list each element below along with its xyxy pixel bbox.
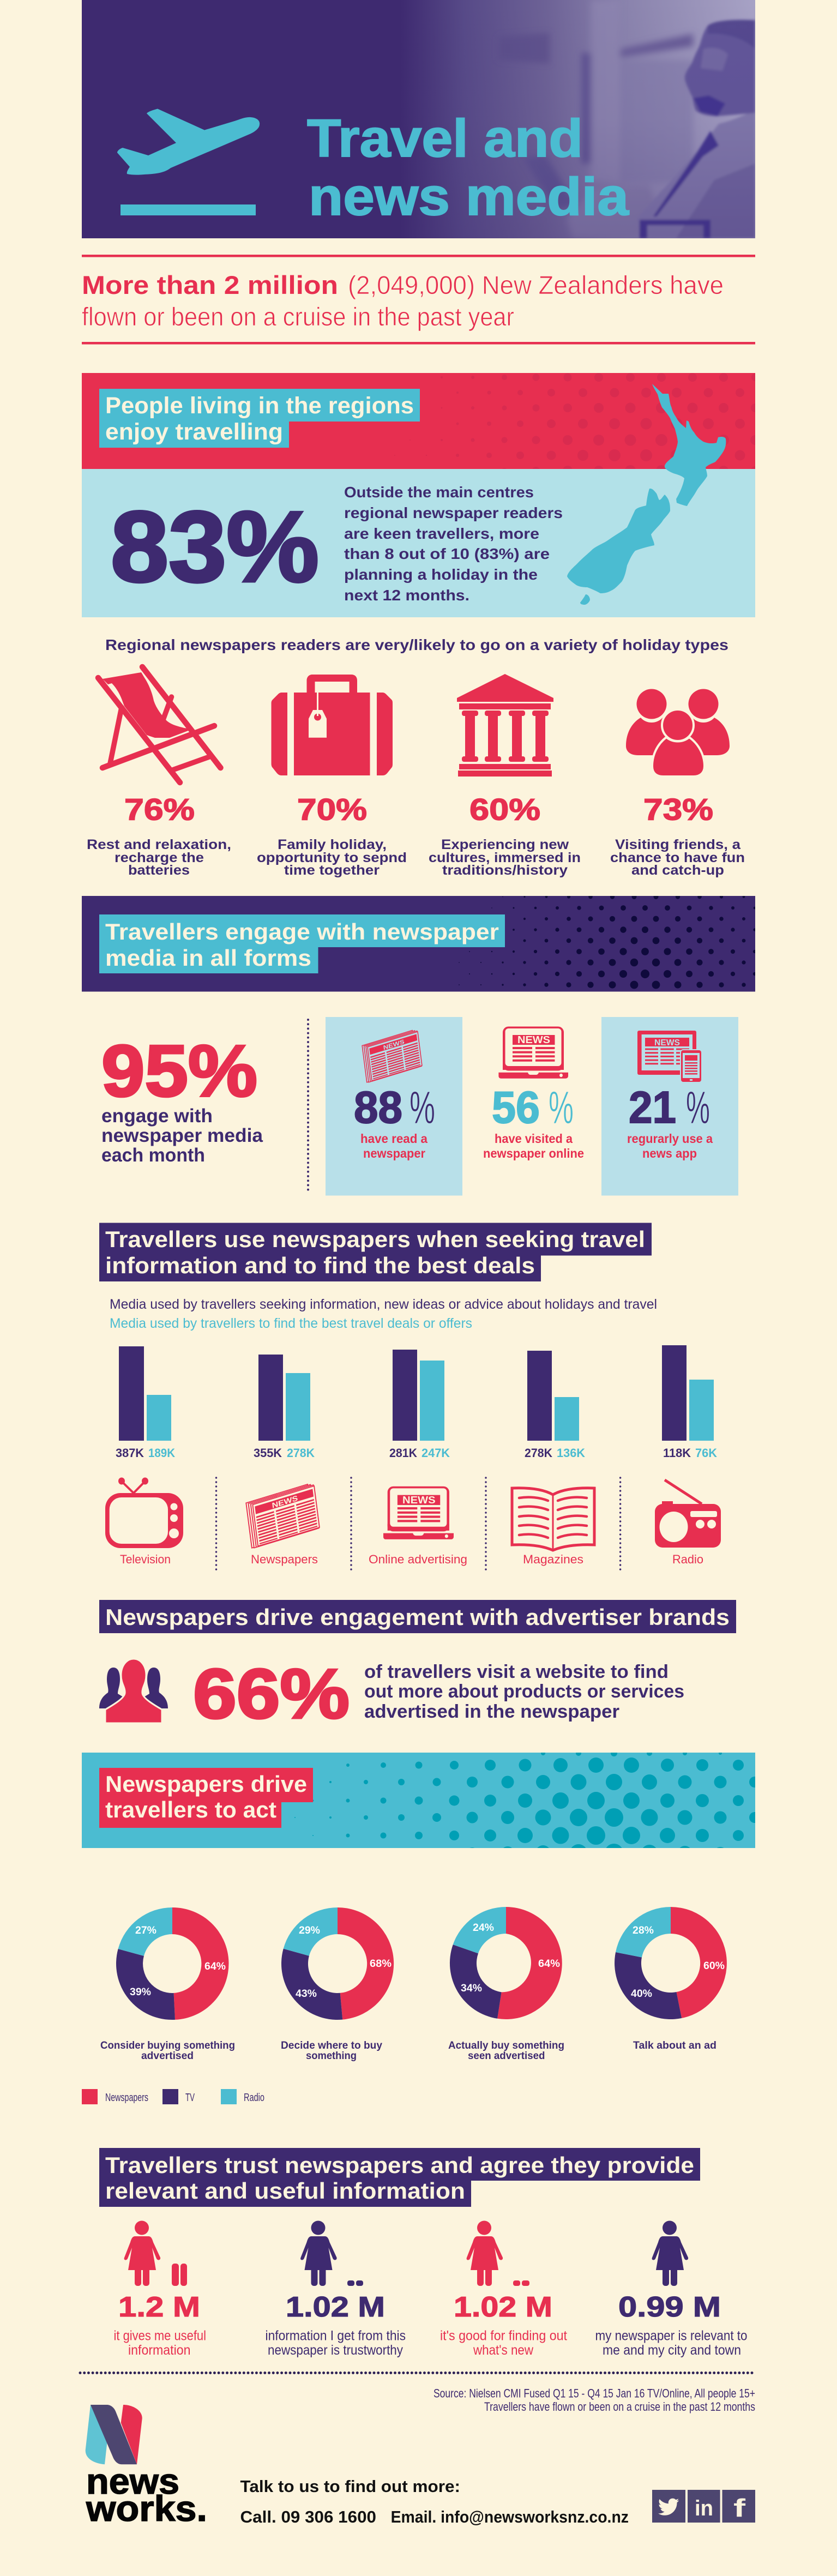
icon: facebook: f [733, 2494, 746, 2522]
icon: television [105, 1478, 183, 1548]
captions: time together [284, 863, 380, 878]
legend: donut charts: Radio [244, 2092, 264, 2104]
bar chart: 278K [287, 1446, 315, 1460]
stat: 95% engage: newspaper media [101, 1125, 263, 1146]
donut chart: actually buy [448, 1907, 564, 2062]
bar chart: 281K [389, 1446, 417, 1460]
icon: tablet and phone [637, 1031, 702, 1082]
icon: suitcase [272, 675, 393, 775]
legend: chart series [110, 1297, 657, 1331]
stat: 1.2 M useful: information [128, 2343, 191, 2358]
source note [433, 2386, 755, 2414]
captions: chance to have fun [610, 850, 745, 865]
icon: plane taking off [117, 109, 260, 215]
icon: radio [655, 1480, 721, 1548]
caption: newspaper online [483, 1146, 584, 1160]
stat: 95% engage: engage with [101, 1105, 213, 1127]
captions: recharge the [115, 850, 204, 865]
heading box: Travellers engage with newspaper [105, 919, 499, 944]
stat: 1.02 M trustworthy: 1.02 M [286, 2291, 385, 2323]
stat: 1.02 M trustworthy [265, 2220, 406, 2358]
icon: woman [652, 2220, 688, 2286]
infographic page [79, 0, 755, 2525]
stat: 1.02 M trustworthy: newspaper is trustworthy [268, 2343, 403, 2358]
caption [627, 1131, 713, 1160]
bar chart: 189K [148, 1446, 175, 1460]
text block: out more about products or services [364, 1681, 684, 1702]
icon: laptop: NEWS [517, 1034, 550, 1045]
labels [120, 1552, 703, 1566]
heading: travellers trust: relevant and useful information [105, 2178, 465, 2204]
text block: keen travellers [344, 484, 563, 604]
stat: 1.2 M useful [113, 2220, 206, 2358]
icon: linkedin: in [695, 2496, 713, 2520]
icon: laptop [498, 1028, 568, 1079]
donut chart: actually buy: 64% [538, 1958, 560, 1970]
legend: chart series: Media used by travellers to find the best travel deals or offers [110, 1316, 472, 1331]
donut chart: talk about [615, 1907, 727, 2051]
panel: 66% stat [99, 1654, 684, 1733]
captions: Rest and relaxation, [87, 837, 231, 852]
caption [483, 1131, 584, 1160]
stat: 21%: % [686, 1082, 710, 1133]
caption: regurarly use a [627, 1131, 713, 1146]
heading box: Newspapers drive [105, 1771, 307, 1797]
donut chart: decide where: 68% [370, 1958, 392, 1970]
captions: Visiting friends, a [615, 837, 741, 852]
icon: facebook [722, 2490, 755, 2523]
stat: 88% [354, 1082, 435, 1133]
labels: Magazines [523, 1552, 583, 1566]
donut chart: talk about: 40% [631, 1988, 652, 2000]
text block: keen travellers: next 12 months. [344, 587, 469, 604]
icon: twitter [652, 2490, 685, 2523]
source note: Source: Nielsen CMI Fused Q1 15 - Q4 15 Jan 16 TV/Online, All people 15+ [433, 2386, 755, 2400]
bar chart: 247K [421, 1446, 450, 1460]
title: news media [309, 167, 629, 226]
stat: 1.02 M trustworthy: information I get from this [265, 2328, 406, 2344]
panel: holiday types [87, 667, 745, 878]
captions: traditions/history [442, 863, 568, 878]
heading box: media in all forms [105, 945, 311, 971]
donut chart: actually buy: Actually buy something [448, 2039, 564, 2051]
bar chart: 118K [663, 1446, 691, 1460]
intro statement: flown or been on a cruise in the past year [82, 302, 514, 331]
icon: woman with partial figure [300, 2220, 363, 2286]
panel: drive travellers to act banner [82, 1753, 755, 1848]
panel: news app [601, 1017, 738, 1195]
percentages: 60% [469, 792, 540, 827]
bar chart [116, 1345, 717, 1460]
contact details: Email. info@newsworksnz.co.nz [391, 2507, 629, 2526]
heading box: People living in the regions [105, 393, 414, 419]
panel: visited online [483, 1028, 584, 1160]
donut chart: decide where: 43% [296, 1988, 317, 2000]
stat: 88%: 88 [354, 1082, 402, 1133]
icon: tablet and phone: NEWS [654, 1038, 680, 1048]
icon: woman with partial figure [124, 2220, 187, 2286]
panel: read a newspaper [326, 1017, 462, 1195]
donut chart: consider buying: Consider buying something [100, 2039, 235, 2051]
labels: Newspapers [251, 1552, 318, 1566]
text block: keen travellers: than 8 out of 10 (83%) are [344, 545, 550, 562]
legend: donut charts: TV [185, 2092, 195, 2104]
logo: news works [86, 2405, 207, 2529]
percentages [124, 792, 713, 827]
donut chart: talk about: 28% [633, 1925, 654, 1936]
percentages: 73% [643, 792, 713, 827]
bar chart: 278K [525, 1446, 552, 1460]
stat: 56%: 56 [492, 1082, 540, 1133]
icon: people silhouettes [99, 1659, 168, 1723]
contact details [240, 2477, 629, 2526]
icon: laptop: NEWS [402, 1494, 436, 1506]
captions: opportunity to sepnd [257, 850, 407, 865]
contact details: Call. 09 306 1600 [240, 2507, 376, 2526]
donut chart: decide where: 29% [299, 1925, 320, 1936]
panel: travellers engage banner [82, 894, 756, 991]
panel: regions travelling [82, 373, 760, 617]
text block: of travellers visit a website to find [364, 1662, 669, 1682]
stat: 95% engage: each month [101, 1145, 205, 1166]
percentages: 76% [124, 792, 195, 827]
icon: runway bar [121, 204, 256, 215]
stat: 56%: % [549, 1082, 574, 1133]
stat: 21%: 21 [629, 1082, 676, 1133]
heading: travellers trust: Travellers trust newspapers and agree they provide [105, 2152, 694, 2178]
icon: open magazine [512, 1488, 594, 1550]
text block: advertised in the newspaper [364, 1701, 619, 1722]
captions: Family holiday, [278, 837, 387, 852]
stat: 21% [629, 1082, 710, 1133]
stat: 1.02 M what's new: 1.02 M [454, 2291, 552, 2323]
icon: linkedin [688, 2490, 720, 2523]
heading: travel information: Travellers use newspapers when seeking travel [105, 1226, 645, 1252]
map: New Zealand [567, 384, 726, 605]
logo: news works: news [86, 2461, 179, 2501]
stat: 0.99 M relevant: 0.99 M [618, 2291, 721, 2323]
stat: 88%: % [410, 1082, 435, 1133]
legend: chart series: Media used by travellers seeking information, new ideas or advice about holidays and travel [110, 1297, 657, 1312]
caption: have read a [360, 1131, 427, 1146]
donut chart: talk about: 60% [703, 1960, 725, 1972]
donut chart: actually buy: seen advertised [468, 2050, 545, 2062]
stat: 95% engage [101, 1031, 263, 1166]
caption: newspaper [363, 1146, 425, 1160]
captions: Experiencing new [441, 837, 569, 852]
intro statement [82, 255, 755, 345]
stat: 95% engage: 95% [101, 1031, 257, 1112]
icon: newspaper [246, 1483, 320, 1549]
donut chart: decide where: Decide where to buy [281, 2039, 382, 2051]
text block: keen travellers: planning a holiday in the [344, 566, 538, 583]
stat: 56% [492, 1082, 574, 1133]
icon: woman with partial figure [467, 2220, 529, 2286]
bar chart: 76K [695, 1446, 717, 1460]
heading box [99, 389, 420, 448]
text block: keen travellers: Outside the main centres [344, 484, 534, 501]
subheading: holiday types: Regional newspapers readers are very/likely to go on a variety of holiday types [105, 636, 728, 653]
donut chart: talk about: Talk about an ad [633, 2039, 716, 2051]
text block: keen travellers: regional newspaper readers [344, 504, 563, 521]
caption: have visited a [495, 1131, 573, 1146]
heading box [99, 914, 505, 973]
bar chart: 355K [254, 1446, 282, 1460]
icon: deck chair [98, 667, 220, 783]
stat: 0.99 M relevant: my newspaper is relevant to [595, 2328, 747, 2344]
stat: 83%: 83% [111, 490, 319, 603]
stat: 0.99 M relevant: me and my city and town [603, 2343, 741, 2358]
title: Travel and [307, 109, 583, 168]
captions [87, 837, 745, 878]
captions: cultures, immersed in [429, 850, 581, 865]
donut chart: consider buying: 39% [130, 1987, 151, 1998]
captions: and catch-up [631, 863, 724, 878]
heading: advertiser brands: Newspapers drive engagement with advertiser brands [105, 1604, 730, 1630]
stat: 1.02 M what's new [440, 2220, 567, 2358]
intro statement: More than 2 million [82, 270, 338, 299]
stat: 66%: 66% [193, 1654, 350, 1733]
donut chart: decide where [281, 1907, 394, 2062]
stat: 1.02 M what's new: it's good for finding out [440, 2328, 567, 2344]
donut chart: consider buying: 27% [135, 1925, 156, 1936]
labels: Television [120, 1552, 171, 1566]
donut chart: consider buying: advertised [141, 2050, 194, 2062]
stat: 1.02 M what's new: what's new [473, 2343, 534, 2358]
caption [360, 1131, 427, 1160]
text block: keen travellers: are keen travellers, more [344, 525, 539, 542]
heading box: travellers to act [105, 1797, 276, 1822]
donut chart: consider buying: 64% [204, 1961, 226, 1972]
icon: laptop [383, 1488, 454, 1539]
intro statement: (2,049,000) New Zealanders have [348, 270, 724, 299]
stat: 0.99 M relevant [595, 2220, 747, 2358]
heading box [99, 1768, 313, 1828]
heading box: enjoy travelling [105, 419, 283, 445]
panel: hero banner [82, 0, 755, 238]
percentages: 70% [297, 792, 367, 827]
caption: news app [642, 1146, 697, 1160]
icon: temple [457, 674, 553, 777]
heading: travel information: information and to find the best deals [105, 1253, 535, 1278]
donut chart: consider buying [100, 1907, 235, 2062]
labels: Online advertising [369, 1552, 467, 1566]
donut chart: actually buy: 34% [461, 1983, 482, 1994]
icon: newspaper [362, 1029, 422, 1083]
title [307, 109, 629, 226]
text block [364, 1662, 684, 1722]
social icons [652, 2490, 755, 2523]
heading: travel information [99, 1223, 652, 1281]
panel: media icons [105, 1478, 721, 1571]
logo: news works: works. [86, 2488, 207, 2529]
captions: batteries [128, 863, 190, 878]
stat: 1.2 M useful: 1.2 M [118, 2291, 200, 2323]
legend: donut charts: Newspapers [105, 2092, 148, 2104]
contact details: Talk to us to find out more: [240, 2477, 460, 2496]
icon: newspaper: NEWS [383, 1038, 405, 1051]
legend: donut charts [82, 2089, 264, 2104]
icon: newspaper: NEWS [272, 1494, 298, 1510]
bar chart: 136K [557, 1446, 585, 1460]
donut chart: actually buy: 24% [473, 1922, 494, 1934]
heading: travellers trust [99, 2148, 700, 2207]
bar chart: 387K [116, 1446, 144, 1460]
icon: group of people [626, 689, 730, 777]
donut chart: decide where: something [306, 2050, 357, 2062]
source note: Travellers have flown or been on a cruise in the past 12 months [484, 2400, 755, 2414]
labels: Radio [672, 1552, 703, 1566]
stat: 1.2 M useful: it gives me useful [113, 2328, 206, 2344]
photo: man at airport window [400, 0, 755, 238]
